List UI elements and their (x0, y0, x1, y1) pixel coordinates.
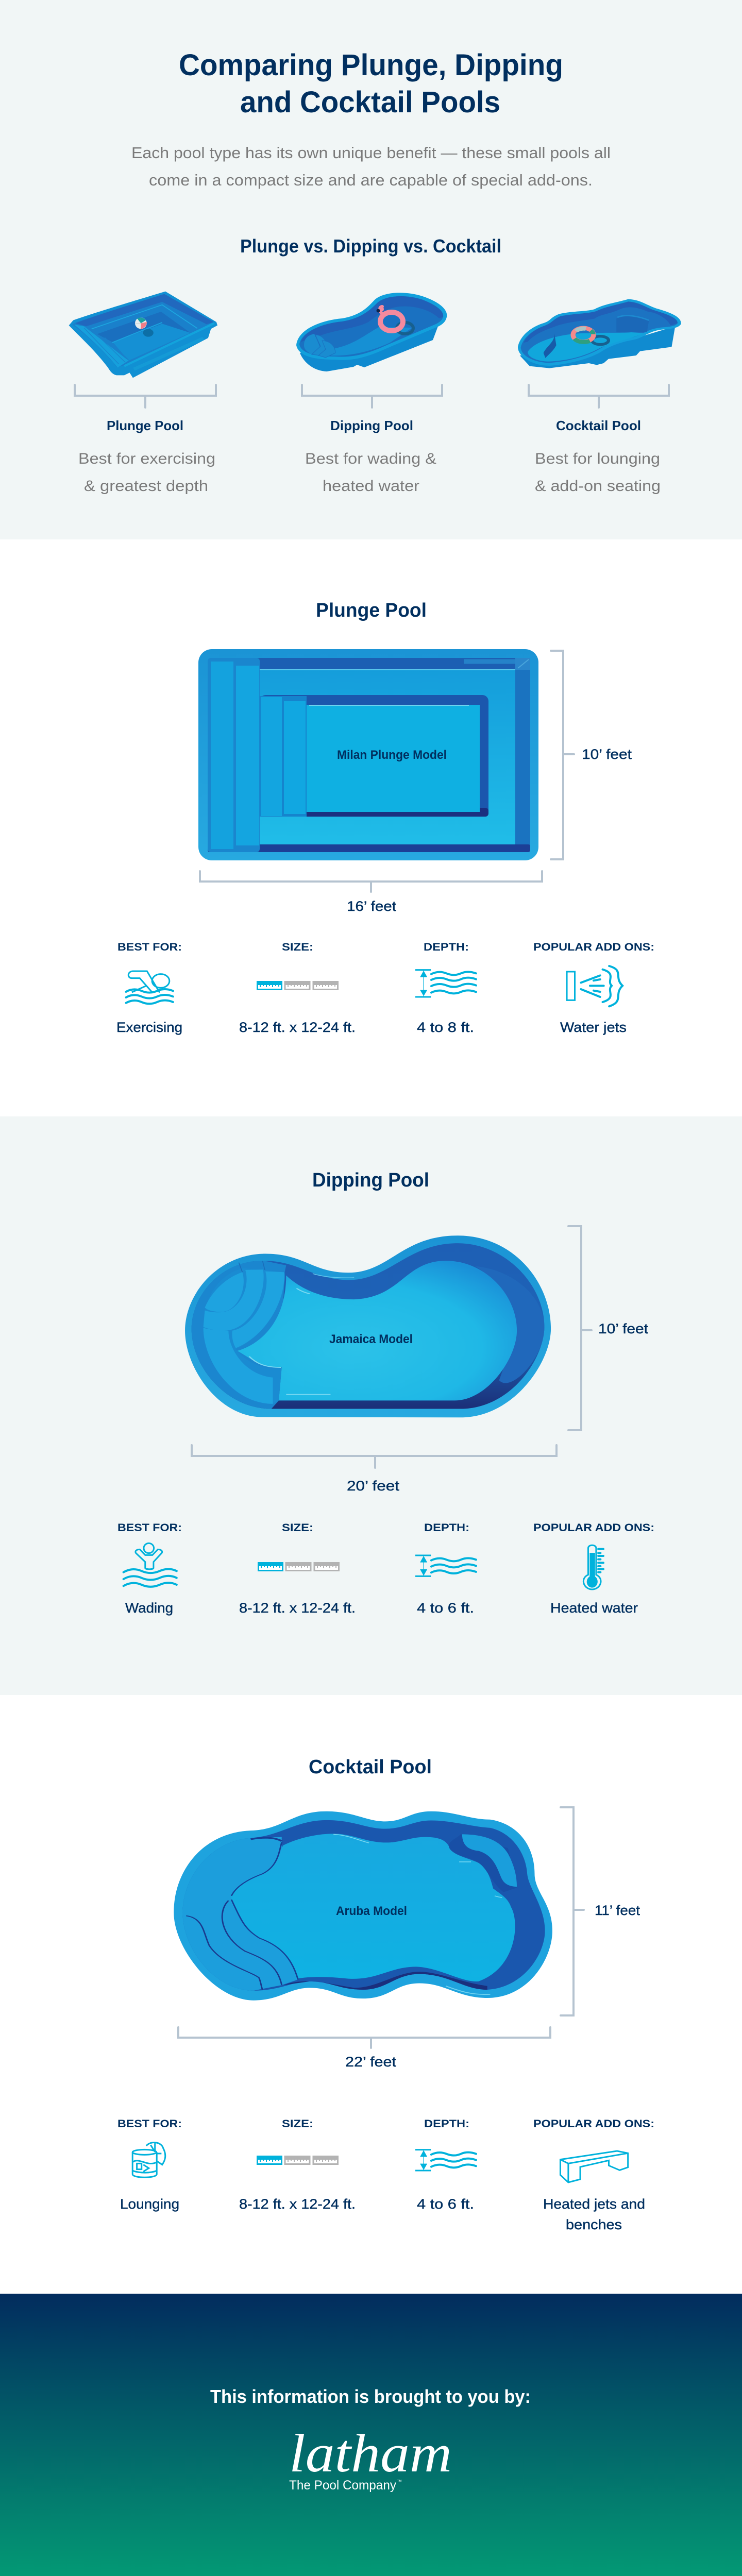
column: best for: BEST FOR: (117, 1522, 182, 1534)
icon: water jets (567, 966, 622, 1006)
pool plan: Milan Plunge (198, 649, 538, 860)
column: size (239, 2118, 356, 2212)
column: best for: BEST FOR: (117, 941, 182, 953)
icon: wading person (124, 1543, 177, 1587)
dimension: width: 22’ feet (345, 2054, 397, 2070)
panel: plunge pool (0, 539, 742, 1116)
icon: dipping pool 3D view (296, 293, 447, 371)
column: add ons (533, 2118, 654, 2232)
icon: cocktail (132, 2143, 165, 2177)
ring float (573, 328, 594, 342)
column: depth: DEPTH: (424, 941, 469, 953)
column: dipping summary: Dipping Pool (330, 418, 413, 433)
column: size: SIZE: (282, 941, 313, 953)
column: plunge summary (78, 418, 215, 495)
bracket: dipping (302, 385, 442, 408)
title (179, 48, 563, 119)
icon: depth waves (415, 2150, 476, 2171)
heading: Plunge Pool (316, 600, 427, 621)
column: dipping summary: heated water (323, 478, 419, 495)
title: Comparing Plunge, Dipping (179, 48, 563, 82)
title: and Cocktail Pools (240, 86, 500, 119)
column: cocktail summary: Best for lounging (535, 450, 660, 467)
pool plan: Jamaica (185, 1235, 551, 1417)
icon: ruler (258, 982, 338, 989)
column: depth: DEPTH: (424, 1522, 469, 1534)
column: depth: 4 to 6 ft. (417, 1600, 474, 1616)
column: best for (116, 941, 182, 1035)
icon: ruler (258, 2157, 338, 2164)
bracket: cocktail (529, 385, 669, 408)
panel: cocktail pool (0, 1695, 742, 2294)
column: add ons: POPULAR ADD ONS: (533, 941, 654, 953)
column: plunge summary: Plunge Pool (107, 418, 183, 433)
column: add ons (533, 1522, 654, 1616)
column: add ons: Heated water (550, 1600, 638, 1616)
column: depth (415, 1522, 476, 1616)
column: add ons: Heated jets and (543, 2196, 645, 2212)
column: best for: Wading (125, 1600, 173, 1616)
shadow of ball (143, 329, 154, 337)
logo: ™ (397, 2479, 402, 2485)
footer heading: This information is brought to you by: (210, 2386, 531, 2407)
flamingo float (376, 307, 403, 331)
column: dipping summary: Best for wading & (305, 450, 436, 467)
logo: latham (289, 2423, 452, 2483)
model label: Jamaica Model (329, 1332, 413, 1346)
column: best for (117, 2118, 182, 2212)
column: depth (415, 941, 476, 1035)
intro paragraph: Each pool type has its own unique benefit — these small pools all (131, 144, 611, 162)
bracket: plunge (75, 385, 216, 408)
stats row (117, 2118, 654, 2232)
model label: Milan Plunge Model (337, 748, 447, 762)
column: size: SIZE: (282, 1522, 313, 1534)
dimension: width (192, 1445, 556, 1494)
beach ball (135, 317, 147, 329)
heading: Cocktail Pool (309, 1756, 432, 1778)
column: size (239, 1522, 356, 1616)
column: depth (415, 2118, 476, 2212)
column: best for (117, 1522, 182, 1616)
column: size: SIZE: (282, 2118, 313, 2130)
column: dipping summary (305, 418, 436, 495)
dimension: height (561, 1807, 640, 2015)
intro paragraph (131, 144, 611, 189)
icon: depth waves (415, 970, 476, 997)
panel: footer (0, 2294, 742, 2576)
column: cocktail summary: Cocktail Pool (556, 418, 641, 433)
icon: plunge pool 3D view (69, 292, 217, 378)
column: add ons (533, 941, 654, 1035)
column: best for: Exercising (116, 1020, 182, 1035)
icon: thermometer (583, 1545, 603, 1589)
column: size: 8-12 ft. x 12-24 ft. (239, 1020, 356, 1035)
subheading: Plunge vs. Dipping vs. Cocktail (240, 235, 501, 257)
stats row (117, 1522, 654, 1616)
dimension: height (568, 1226, 649, 1430)
column: add ons: POPULAR ADD ONS: (533, 1522, 654, 1534)
shadow of float (397, 323, 413, 334)
icon: swimmer (126, 971, 173, 1004)
icon: ruler (259, 1563, 339, 1570)
shadow of ring (592, 336, 609, 345)
stats row (116, 941, 654, 1035)
column: depth: 4 to 8 ft. (417, 1020, 474, 1035)
column: best for: BEST FOR: (117, 2118, 182, 2130)
column: size: 8-12 ft. x 12-24 ft. (239, 2196, 356, 2212)
model label: Aruba Model (336, 1904, 407, 1918)
icon: depth waves (415, 1555, 476, 1576)
heading: Dipping Pool (312, 1170, 429, 1191)
panel: dipping pool (0, 1116, 742, 1695)
dimension: height (551, 651, 632, 859)
intro paragraph: come in a compact size and are capable of special add-ons. (149, 171, 593, 189)
column: size (239, 941, 356, 1035)
panel: intro (0, 0, 742, 539)
column: best for: Lounging (120, 2196, 179, 2212)
column: add ons: benches (566, 2217, 622, 2232)
dimension: width (200, 871, 542, 914)
icon: bench (560, 2151, 628, 2182)
column: plunge summary: & greatest depth (84, 478, 208, 495)
column: size: 8-12 ft. x 12-24 ft. (239, 1600, 356, 1616)
dimension: width: 16’ feet (347, 899, 397, 914)
dimension: width: 20’ feet (347, 1478, 400, 1494)
column: depth: 4 to 6 ft. (417, 2196, 474, 2212)
dimension: height: 10’ feet (582, 747, 632, 762)
column: cocktail summary: & add-on seating (535, 478, 661, 495)
pool plan: Aruba (174, 1811, 552, 2001)
column: cocktail summary (535, 418, 661, 495)
dimension: height: 11’ feet (595, 1903, 640, 1918)
column: depth: DEPTH: (424, 2118, 469, 2130)
logo: The Pool Company (289, 2478, 396, 2493)
dimension: width (178, 2027, 550, 2070)
column: add ons: POPULAR ADD ONS: (533, 2118, 654, 2130)
column: plunge summary: Best for exercising (78, 450, 215, 467)
icon: cocktail pool 3D view (518, 299, 681, 368)
column: add ons: Water jets (560, 1020, 627, 1035)
dimension: height: 10’ feet (598, 1321, 649, 1336)
